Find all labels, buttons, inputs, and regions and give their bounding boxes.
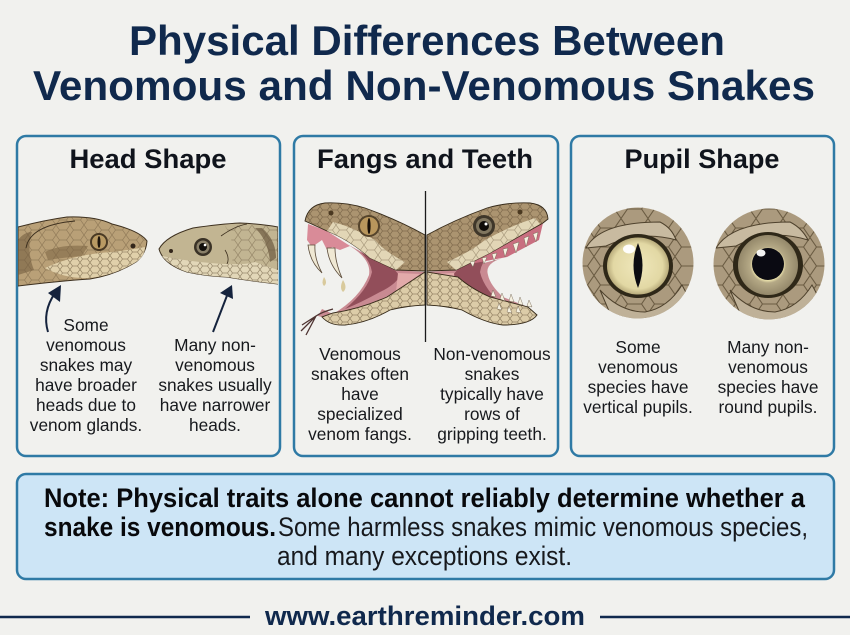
- text: non-venomous head caption: heads.: [189, 415, 241, 435]
- heading: pupil shape: Pupil Shape: [624, 144, 780, 174]
- icon: vertical pupil eye: [582, 207, 694, 325]
- title: Venomous and Non-Venomous Snakes: [33, 62, 815, 109]
- panel: head shape: [17, 136, 280, 456]
- text: vertical pupil caption: vertical pupils.: [583, 397, 693, 417]
- text: venomous head caption: [30, 315, 142, 435]
- icon: venomous snake open mouth with fangs: [301, 203, 425, 335]
- text: round pupil caption: [718, 337, 818, 417]
- text: vertical pupil caption: venomous: [598, 357, 678, 377]
- callout: note: and many exceptions exist.: [277, 541, 572, 571]
- text: venomous head caption: heads due to: [36, 395, 136, 415]
- text: non-venomous head caption: venomous: [175, 355, 255, 375]
- callout: note: [17, 474, 834, 579]
- text: non-venomous teeth caption: gripping teeth.: [437, 424, 547, 444]
- text: venomous fangs caption: specialized: [317, 404, 403, 424]
- text: round pupil caption: Many non-: [727, 337, 809, 357]
- icon: round pupil eye: [713, 208, 825, 325]
- divider line between snakes: [424, 191, 426, 342]
- icon: non-venomous snake head, narrow: [159, 223, 278, 284]
- arrow: non-venomous head: [213, 285, 233, 332]
- text: non-venomous teeth caption: rows of: [464, 404, 520, 424]
- text: vertical pupil caption: Some: [615, 337, 661, 357]
- text: non-venomous head caption: Many non-: [174, 335, 256, 355]
- panel: fangs and teeth: [294, 136, 558, 456]
- text: non-venomous teeth caption: [433, 344, 551, 444]
- icon: non-venomous snake open mouth with teeth: [427, 203, 548, 325]
- text: non-venomous head caption: have narrower: [160, 395, 270, 415]
- footer: website: www.earthreminder.com: [264, 601, 585, 631]
- heading: fangs and teeth: Fangs and Teeth: [317, 144, 533, 174]
- text: venomous fangs caption: snakes often: [311, 364, 409, 384]
- text: venomous fangs caption: venom fangs.: [308, 424, 412, 444]
- text: non-venomous teeth caption: Non-venomous: [433, 344, 551, 364]
- text: vertical pupil caption: [583, 337, 693, 417]
- text: venomous fangs caption: Venomous: [319, 344, 401, 364]
- panel: pupil shape: [571, 136, 834, 456]
- text: round pupil caption: species have: [718, 377, 818, 397]
- text: venomous fangs caption: have: [341, 384, 379, 404]
- callout: note: Some harmless snakes mimic venomous species,: [278, 512, 808, 542]
- arrow: venomous head: [46, 285, 61, 332]
- callout: note: snake is venomous.: [44, 512, 276, 542]
- title: [33, 17, 815, 109]
- text: non-venomous teeth caption: typically have: [440, 384, 544, 404]
- icon: venomous snake head, broad: [18, 217, 147, 286]
- text: venomous fangs caption: [308, 344, 412, 444]
- text: venomous head caption: venomous: [46, 335, 126, 355]
- text: non-venomous head caption: snakes usually: [158, 375, 272, 395]
- callout: note: Note: Physical traits alone cannot reliably determine whether a: [44, 483, 805, 513]
- text: round pupil caption: venomous: [728, 357, 808, 377]
- text: vertical pupil caption: species have: [588, 377, 688, 397]
- heading: head shape: Head Shape: [70, 144, 226, 174]
- text: round pupil caption: round pupils.: [719, 397, 817, 417]
- text: venomous head caption: Some: [63, 315, 109, 335]
- title: Physical Differences Between: [129, 17, 725, 64]
- text: non-venomous teeth caption: snakes: [465, 364, 520, 384]
- text: non-venomous head caption: [158, 335, 272, 435]
- text: venomous head caption: venom glands.: [30, 415, 142, 435]
- text: venomous head caption: snakes may: [40, 355, 132, 375]
- text: venomous head caption: have broader: [35, 375, 137, 395]
